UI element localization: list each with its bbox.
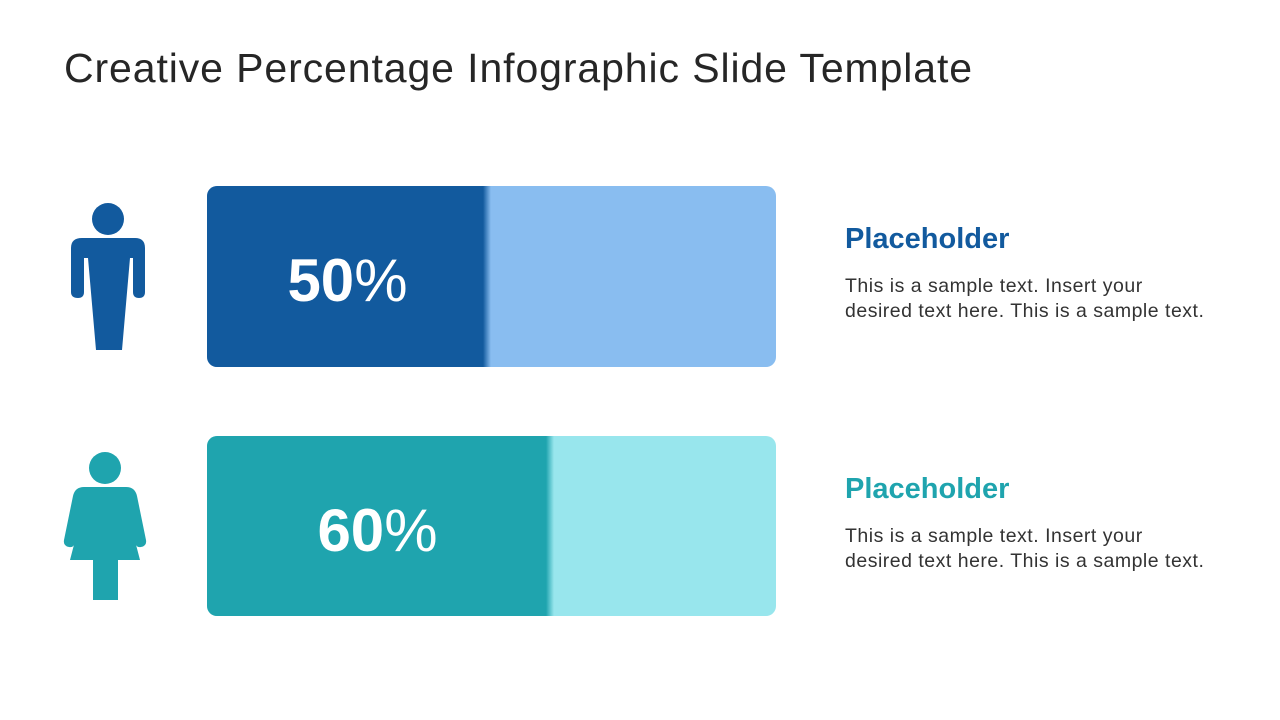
percentage 60: 60% [317,497,438,564]
text block 1: desired text here. This is a sample text. [845,300,1204,322]
icon: man [71,203,145,350]
text block 2 [845,473,1204,572]
text block 2: Placeholder [845,473,1009,505]
text block 2: This is a sample text. Insert your [845,525,1143,547]
bar: 60% [207,436,776,616]
text block 1 [845,223,1204,322]
percentage 50: 50% [287,247,408,314]
text block 2: desired text here. This is a sample text. [845,550,1204,572]
bar: 50% [207,186,776,367]
icon: woman [64,452,146,600]
text block 1: Placeholder [845,223,1009,255]
text block 1: This is a sample text. Insert your [845,275,1143,297]
title: Creative Percentage Infographic Slide Template [64,45,973,91]
